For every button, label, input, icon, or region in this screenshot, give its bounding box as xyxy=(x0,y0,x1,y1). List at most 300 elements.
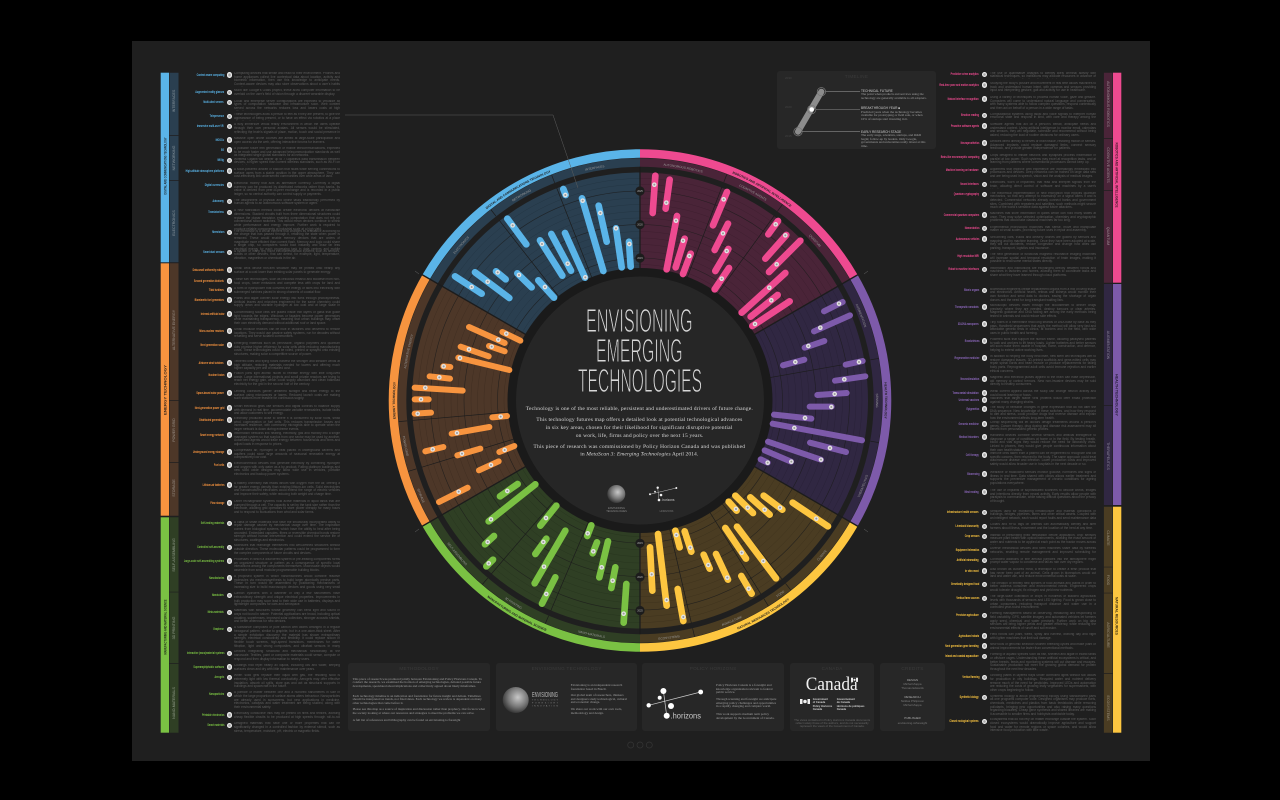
intro text: on work, life, firms and policy over the next 15 years. xyxy=(576,432,704,439)
title: ENVISIONING xyxy=(586,302,693,339)
left category band: energy: POWER GRID xyxy=(172,418,176,442)
item: neurostimulation: Neurostimulation xyxy=(960,377,979,381)
panel: methodology: METHODOLOGY xyxy=(399,666,439,671)
ring sub-category labels: THERAPEUTICS xyxy=(858,474,868,497)
methodology paragraph 3: Please see this map as a source of inspiration and discussion rather than prophecy. Our focus is what the society looking at where our resources and strategies to meet the problems we can solve. xyxy=(353,707,485,715)
item: closed ecological systems xyxy=(930,718,1096,733)
item: mind reading: Mind reading xyxy=(965,490,979,494)
central disc xyxy=(516,276,764,524)
item: designer body xyxy=(930,390,1096,397)
item: data-small uniformity robots xyxy=(192,267,340,274)
legend diagram: 2015 xyxy=(785,134,792,138)
ring category labels: ENERGY TECHNOLOGY xyxy=(392,382,396,419)
year badges: 2015 xyxy=(637,257,643,260)
item: infrastructure health sensors: Infrastructure health sensors xyxy=(947,510,979,514)
item: vertical farm xyxy=(930,595,1096,610)
year badges: 2025 xyxy=(637,609,643,612)
item: biomimetics: Nanotubes xyxy=(212,593,224,597)
envisioning text 3: We share our work with our own tools, methodology and design. xyxy=(571,707,622,715)
item: DNA nanopores xyxy=(930,321,1096,336)
item: human augmentation xyxy=(930,267,1096,278)
item: equipment telematics xyxy=(930,547,1096,555)
intro text xyxy=(526,405,753,458)
item: aerogels: Aerogels xyxy=(214,675,224,679)
item: smart materials xyxy=(180,722,340,733)
ring sub-category labels: AGRICULTURE xyxy=(722,616,742,626)
item: digital currencies: Digital currencies xyxy=(205,183,224,187)
ring sub-category labels: AUGMENTATION xyxy=(856,304,866,328)
ring sub-category labels: COGNITIVE AGENTS xyxy=(739,184,766,200)
ring sub-category labels: ELECTRONICS xyxy=(453,236,469,254)
item: meta materials: Meta-materials xyxy=(208,610,224,614)
item: autonomous vehicles: Autonomous vehicles xyxy=(955,237,979,241)
item: fuel cells: Fuel cells xyxy=(214,463,224,467)
item: superamphiphobic surfaces: Superamphiphobic surfaces xyxy=(193,665,224,669)
legend text: breakthrough year: Predicted years when the technology becomes available for prototyping or field sale, or when 10% of startups start investing in it. xyxy=(861,110,923,121)
item: therapeutic nanobots: Therapeutic nanobots xyxy=(955,305,979,309)
item: next generation solar: Next generation solar xyxy=(201,343,224,347)
item: nanoparticles: Nanoparticles xyxy=(209,692,224,696)
item: cell therapy xyxy=(930,452,1096,470)
credit: publisher: envisioning.io/foresight xyxy=(898,720,927,724)
left category band: energy xyxy=(161,263,176,516)
item: memristors: Memristors xyxy=(212,230,224,234)
item: bionic organs: Bionic organs xyxy=(964,288,979,292)
item: fish and insects: Vertical farming xyxy=(962,675,979,679)
item: 4D printing xyxy=(180,712,340,719)
legend text: maturity: TECHNICAL FUTURE xyxy=(861,89,893,93)
right category band: health technology: HEALTH TECHNOLOGY xyxy=(1115,374,1120,416)
bars: natural resources technology xyxy=(650,496,828,621)
item: aerogels xyxy=(180,674,340,689)
item: agricultural robots xyxy=(930,633,1096,640)
ring sub-category labels: ALTERNATIVE ENERGY xyxy=(404,334,413,368)
item: epigenetics: Epigenetics xyxy=(966,407,979,411)
item: nanorobots: Nanorobotics xyxy=(964,226,979,230)
legend text: maturity xyxy=(861,90,927,101)
ring sub-category labels xyxy=(402,131,878,640)
item: equipment telematics: Equipment telematics xyxy=(955,548,979,552)
legend text: development stage: EARLY RESEARCH STAGE xyxy=(861,130,901,134)
credit: design xyxy=(880,678,945,690)
item: genetically designed food xyxy=(930,582,1096,593)
item: neurostimulation xyxy=(930,376,1096,387)
item: transistorless: Transistorless xyxy=(209,210,224,214)
methodology paragraph 2: Each technology timeline is an indication and foundation for future insight and debate. Timelines should be interpreted as trends, not fixed dates. Each technology we review is dependent on many other technologies that come before it. xyxy=(353,694,482,705)
horizons text 2: Through scanning and foresight we anticipate emerging policy challenges and opportunities in a rapidly changing and complex world. xyxy=(716,697,776,708)
left category band: digital and communications: DIGITAL AND COMMUNICATIONS TECHNOLOGY xyxy=(162,137,167,194)
right category band: natural resources technology: FOOD xyxy=(1106,575,1110,586)
year badges: 2015 xyxy=(637,542,643,545)
credit: design: DESIGN xyxy=(907,678,918,682)
horizons text 1: Policy Horizons Canada is a foresight and knowledge organization relevant to federal public service. xyxy=(716,683,772,694)
ring sub-category labels: INTERFACES xyxy=(585,165,604,171)
item: genetically designed food: Genetically designed food xyxy=(951,582,979,586)
item: aquaculture xyxy=(930,653,1096,672)
item: exoskeletons: Exoskeletons xyxy=(964,339,979,343)
item: nanoparticles xyxy=(180,691,340,710)
left category band: digital and communications: ELECTRONICS xyxy=(172,210,176,236)
ring sub-category labels: SELF-ASSEMBLING xyxy=(448,542,467,566)
right category band: robotics and artificial intelligence: QUANTUM xyxy=(1106,227,1110,245)
callout line to digital bar xyxy=(345,115,578,188)
item: neural interface xyxy=(930,181,1096,189)
item: distributed generation: Distributed generation xyxy=(200,418,224,422)
item: WiGig: WiGig xyxy=(217,158,224,162)
poster background panel xyxy=(132,41,1150,761)
year badges: 2020 xyxy=(637,223,643,226)
item: space-based solar: Space-based solar power xyxy=(197,391,224,395)
envisioning logo: INNOVATION xyxy=(532,704,558,708)
left category band: manufacturing and material science xyxy=(161,517,176,733)
credit: design: Thomas Edwards xyxy=(901,686,924,690)
item: artificial rain xyxy=(930,558,1096,565)
item: livestock biosecurity: Livestock biosecurity xyxy=(956,524,979,528)
methodology paragraph 4: A full list of references and bibliography can be found on envisioning.io/foresight xyxy=(353,718,460,722)
central dark ring xyxy=(508,268,772,533)
item: next-generation power grid: Next-generation power grid xyxy=(194,406,224,410)
left category band: manufacturing and material science: MANUFACTURING AND MATERIAL SCIENCE xyxy=(162,599,167,654)
item: high resolution MRI xyxy=(930,253,1096,264)
title xyxy=(578,302,702,399)
item: aquaculture: Inland and coastal aquaculture xyxy=(946,654,979,658)
item: mind reading xyxy=(930,489,1096,504)
ring category labels: ROBOTICS AND ARTIFICIAL INTELLIGENCE xyxy=(732,172,792,208)
item: vertical farm: Vertical farm sources xyxy=(956,596,979,600)
legend text: development stage: The early stage, scientists, startups, and R&D begin; follow-up by leaders. Only Google, governments and universities really invest at this time. xyxy=(861,133,925,148)
list: energy technologies xyxy=(192,267,340,514)
time rings xyxy=(418,178,862,622)
canada wordmark: du Canada xyxy=(837,700,851,704)
canada wordmark: Canada xyxy=(806,674,858,695)
item: medical tricorders: Medical tricorders xyxy=(959,435,979,439)
canada wordmark xyxy=(790,663,874,731)
item: synthetic biology xyxy=(930,695,1096,717)
credit: publisher xyxy=(880,716,945,726)
canada wordmark: Government xyxy=(813,697,828,701)
panel: methodology xyxy=(348,663,490,731)
item: quantum cryptography xyxy=(930,192,1096,210)
ring category labels: HEALTH TECHNOLOGY xyxy=(884,382,888,419)
title: EMERGING xyxy=(596,332,683,369)
item: neuroprosthetics xyxy=(930,140,1096,151)
ring sub-category labels: AUTONOMOUS ROBOTICS xyxy=(664,164,702,173)
canada disclaimer: represent the views of the Government of Canada. xyxy=(800,724,865,728)
horizons logo xyxy=(642,663,714,731)
envisioning logo: FORESIGHT xyxy=(532,702,559,704)
credit: publisher: PUBLISHER xyxy=(904,716,921,720)
item: augmented reality glasses: Augmented reality glasses xyxy=(195,90,224,94)
item: commercial quantum xyxy=(930,212,1096,223)
item: vaccines xyxy=(930,397,1096,404)
item: synthetic biology: Synthetic biology xyxy=(960,695,979,699)
left category band: energy: ENERGY TECHNOLOGY xyxy=(162,365,167,415)
right category band: natural resources technology: AGRICULTURE xyxy=(1106,622,1110,648)
legend text: breakthrough year: BREAKTHROUGH YEAR ■ xyxy=(861,106,900,110)
sub-sector dividers xyxy=(399,174,879,636)
canada wordmark: Canada xyxy=(813,707,823,711)
item: nanofactories xyxy=(180,575,340,590)
ring category labels: MANUFACTURING AND MATERIAL SCIENCE xyxy=(487,596,547,632)
logo: envisioning: TECHNOLOGIES xyxy=(606,509,627,513)
ring category labels xyxy=(392,131,888,632)
item: exoskeletons xyxy=(930,338,1096,353)
item: self-healing materials: Self-healing materials xyxy=(200,521,224,525)
item: biosensing: Biosensing xyxy=(967,472,979,476)
right category band: health technology: AUGMENTATION xyxy=(1106,331,1110,360)
envisioning text 2: Our global team of researchers, thinkers and designers study technological, cultural and economic change. xyxy=(571,693,627,704)
circular chart xyxy=(388,149,892,652)
item: neural interface recognition xyxy=(930,96,1096,111)
list: health technology xyxy=(930,284,1096,506)
item: fourth generation breeding: Next generation gene breeding xyxy=(946,644,979,648)
horizons logo: .horizons xyxy=(671,710,701,720)
ring sub-category labels: NANO-MATERIALS xyxy=(578,630,605,638)
methodology paragraph 1: This piece of research was produced jointly between Envisioning and Policy Horizons Canada. To conduct the research, we examined the horizon of emerging technologies, debated possible future developments, speculated about implications and collectively agreed about likely timeframes. xyxy=(353,676,482,688)
boundary ticks xyxy=(415,271,868,532)
envisioning logo xyxy=(496,663,576,731)
item: smart materials: Smart materials xyxy=(207,723,224,727)
left category band: digital and communications xyxy=(161,73,176,262)
intro text: in six key areas, chosen for their likelihood for significant disruptive potential xyxy=(546,424,733,431)
ring sub-category labels: 3D PRINTING xyxy=(505,597,522,609)
right category band: robotics and artificial intelligence: ROBOTICS AND ARTIFICIAL INTELLIGENCE xyxy=(1115,142,1120,208)
item: infrastructure health sensors xyxy=(930,510,1096,521)
year badges: 2020 xyxy=(637,576,643,579)
item: superamphiphobic surfaces xyxy=(180,664,340,671)
item: interactive material systems: Interactive (nano)material systems xyxy=(187,651,224,655)
footer social icons xyxy=(628,742,652,748)
bars: health technology xyxy=(761,302,865,463)
item: human augmentation: Robot to machine interfaces xyxy=(948,267,979,271)
right category band: natural resources technology: CLIMATE xyxy=(1106,530,1110,546)
sector boundaries xyxy=(422,167,858,634)
credit: research: Michell Zappa xyxy=(904,703,922,707)
credit: research: Nicklas Philipsson xyxy=(901,699,924,703)
ring sub-category labels: FOOD xyxy=(776,590,784,598)
item: flow storage: Flow storage xyxy=(210,501,224,505)
item: medical tricorders xyxy=(930,434,1096,452)
item: therapeutic nanobots xyxy=(930,304,1096,319)
credit: research: RESEARCH xyxy=(904,695,921,699)
canada disclaimer: The views contained in Policy Horizons Canada documents xyxy=(794,718,870,722)
item: artificial rain: Artificial rainmaking xyxy=(957,558,979,562)
ring sub-category labels: CLIMATE xyxy=(817,550,827,560)
item: meta materials xyxy=(180,609,340,624)
ring sub-category labels: STORAGE xyxy=(417,488,425,503)
item: in vitro meat: In vitro meat xyxy=(965,569,979,573)
item: predictive crime analytics: Predictive crime analytics xyxy=(951,72,979,76)
panel: canada: CANADA xyxy=(822,666,843,671)
ring category labels: DIGITAL AND COMMUNICATIONS TECHNOLOGY xyxy=(486,170,550,210)
item: high resolution MRI: High resolution MRI xyxy=(957,254,979,258)
item: underground energy storage: Underground energy storage xyxy=(193,450,224,454)
item: smart energy network: Smart energy network xyxy=(200,433,224,437)
logo: policy horizons: HORIZONS xyxy=(660,509,674,513)
right category band: health technology: THERAPEUTICS xyxy=(1106,442,1110,470)
item: graphene xyxy=(180,626,340,648)
panel: credits xyxy=(880,663,945,731)
intro text: This piece of research was commissioned by Policy Horizon Canada and was published xyxy=(533,443,745,450)
item: interactive material systems xyxy=(180,650,340,661)
item: epigenetics xyxy=(930,406,1096,421)
canada disclaimer xyxy=(790,718,874,728)
item: context aware computing: Context aware computing xyxy=(196,73,224,77)
item: vaccines: Universal vaccines xyxy=(958,398,979,402)
item: MOOCs: MOOCs xyxy=(216,138,224,142)
logo: envisioning: ENVISIONING xyxy=(608,506,625,510)
item: smart dust sensors: Smart dust sensors xyxy=(203,250,224,254)
logo: envisioning xyxy=(606,485,627,513)
item: emotion reading xyxy=(930,113,1096,120)
panel: credits: CREDITS xyxy=(901,666,924,671)
legend text: maturity: The point when products and services using the technology are generally available to all adopters. xyxy=(861,92,927,100)
intro text: in MetaScan 3: Emerging Technologies April 2014. xyxy=(580,452,699,458)
right category band: natural resources technology: ECOSYSTEMS xyxy=(1106,696,1110,721)
bars: energy technology xyxy=(415,327,520,502)
item: predictive crime analytics xyxy=(930,72,1096,79)
intro text: This technology futures map offers a detailed look at potential technological advances xyxy=(536,416,742,423)
panel: envisioning technology xyxy=(496,663,637,731)
item: 5G: 5G xyxy=(221,148,224,152)
item: autonomy: Autonomy xyxy=(213,199,224,203)
item: large-scale self-assembling: Large-scale self-assembling systems xyxy=(184,559,224,563)
canada wordmark: Policy Horizons xyxy=(813,704,833,708)
item: 4D printing: Printable electronics xyxy=(202,713,224,717)
item: internal artificial solar: Internal artificial solar xyxy=(200,312,224,316)
item: large-scale self-assembling xyxy=(184,558,340,572)
item: graphene: Graphene xyxy=(213,627,224,631)
legend diagram: 2030 xyxy=(785,76,792,80)
item: crop sensors: Crop sensors xyxy=(964,534,979,538)
item: fourth generation breeding xyxy=(930,643,1096,650)
canada wordmark: of Canada xyxy=(813,700,826,704)
credit: research xyxy=(880,695,945,707)
ring sub-category labels: ECOSYSTEMS xyxy=(658,635,680,640)
item: second generation biofuels: Second generation biofuels xyxy=(194,279,224,283)
item: crop sensors xyxy=(930,534,1096,545)
item: controlled self-assembly xyxy=(197,544,340,555)
item: nanorobots xyxy=(930,226,1096,233)
legend: timeline: TIMELINE xyxy=(845,74,868,79)
ring sub-category labels: NETWORKING xyxy=(512,190,531,202)
panel: policy horizons: POLICY HORIZONS xyxy=(690,666,737,671)
item: brain-like computing: Brain-like neuromorphic computing xyxy=(940,155,979,159)
logo: policy horizons xyxy=(649,486,677,513)
item: real-time pose analytics: Real-time pose and motion analytics xyxy=(939,83,979,87)
legend diagram xyxy=(777,71,936,149)
item: emotion reading: Emotion reading xyxy=(961,113,979,117)
credit: design: Michell Zappa xyxy=(904,682,922,686)
item: regenerative medicine xyxy=(930,355,1096,373)
item: biomimetic fuel: Biomimetic fuel generators xyxy=(195,298,224,302)
item: cell therapy: Cell therapy xyxy=(966,453,979,457)
right category band: natural resources technology: NATURAL RESOURCES xyxy=(1115,597,1120,635)
ring category labels: NATURAL RESOURCES TECHNOLOGY xyxy=(737,598,789,630)
item: designer body: Transcranial stimulation xyxy=(953,391,979,395)
left category band: energy: ALTERNATIVE ENERGY xyxy=(172,309,176,350)
year badges xyxy=(635,186,645,615)
ring sub-category labels: SENSING xyxy=(876,394,878,408)
legend diagram: 2020 xyxy=(785,105,792,109)
list: robotics and artificial intelligence xyxy=(930,70,1096,283)
item: agricultural robots: Agricultural robots xyxy=(958,634,979,638)
outer colour ring xyxy=(393,154,887,648)
sector fills xyxy=(460,220,820,580)
item: biomimetics xyxy=(180,592,340,607)
left category band: manufacturing and material science: 3D PRINTING xyxy=(172,616,176,639)
canada wordmark: Gouvernement xyxy=(837,697,855,701)
list: digital and communications technologies xyxy=(186,72,340,260)
item: high-altitude atmosphere platforms xyxy=(186,168,340,178)
envisioning text 1: Envisioning is an independent research foundation based in Brazil. xyxy=(571,683,622,691)
item: neural interface: Neural interfaces xyxy=(961,182,979,186)
item: biosensing xyxy=(930,471,1096,486)
item: closed ecological systems: Closed ecological systems xyxy=(950,719,979,723)
item: machine learning xyxy=(930,168,1096,179)
bars: digital and communications xyxy=(455,189,631,298)
left category band: energy: STORAGE xyxy=(172,479,176,497)
left category band: manufacturing and material science: NANO-MATERIALS xyxy=(172,687,176,719)
item: bionic organs xyxy=(930,288,1096,302)
item: quantum cryptography: Quantum cryptography xyxy=(954,192,979,196)
item: high-altitude atmosphere platforms: High-altitude atmosphere platforms xyxy=(186,169,224,173)
legend: timeline xyxy=(777,71,936,149)
list: manufacturing and material science xyxy=(184,521,340,733)
item: data-small uniformity robots: Data-small uniformity robots xyxy=(193,268,224,272)
item: neural interface recognition: Natural interface recognition xyxy=(948,97,979,101)
item: genomic medicine xyxy=(930,421,1096,432)
item: proactive software agents xyxy=(930,123,1096,138)
horizons text 3: This work supports medium term policy development by the Government of Canada. xyxy=(716,712,774,720)
canada wordmark: Horizons de politiques xyxy=(837,704,865,708)
ring sub-category labels: POWER GRID xyxy=(402,436,408,456)
list: natural resources technology xyxy=(930,506,1096,734)
item: fish and insects xyxy=(930,674,1096,693)
item: proactive software agents: Proactive software agents xyxy=(951,124,979,128)
item: multi-sited servers: Multi-sited servers xyxy=(204,100,224,104)
right category band: health technology xyxy=(1106,284,1121,505)
right category band: natural resources technology xyxy=(1106,507,1121,733)
item: machine learning: Machine learning on hardware xyxy=(946,168,979,172)
right category band: robotics and artificial intelligence xyxy=(1106,73,1121,283)
item: regenerative medicine: Regenerative medicine xyxy=(954,356,979,360)
item: wind turbine: Airborne wind turbines xyxy=(199,361,224,365)
item: brain-like computing xyxy=(930,154,1096,165)
item: autonomous vehicles xyxy=(930,236,1096,251)
envisioning logo: TECHNOLOGY xyxy=(532,700,559,702)
left category band: digital and communications: INTERFACES xyxy=(172,89,176,112)
item: precision agriculture xyxy=(930,612,1096,631)
bars: manufacturing and material science xyxy=(485,484,626,623)
item: real-time pose analytics xyxy=(930,82,1096,93)
right category band: robotics and artificial intelligence: COGNITIVE AGENTS xyxy=(1106,147,1110,183)
item: immersive multi user AR: Immersive multi-user VR xyxy=(197,124,224,128)
item: nanofactories: Nanofactories xyxy=(209,576,224,580)
year badges: 2025 xyxy=(637,190,643,193)
item: precision agriculture: Precision agriculture xyxy=(956,613,979,617)
left category band: digital and communications: NETWORKING xyxy=(172,145,176,170)
item: micro-nuclear reactors: Micro-nuclear reactors xyxy=(199,329,224,333)
text: TECHNOLOGIES xyxy=(578,362,702,399)
right category band: robotics and artificial intelligence: AUTONOMOUS ROBOTICS xyxy=(1106,81,1110,128)
item: livestock biosecurity xyxy=(930,523,1096,531)
panel: canada xyxy=(790,663,874,731)
canada wordmark: Canada xyxy=(837,707,847,711)
panel: policy horizons xyxy=(642,663,784,731)
sub-category ring xyxy=(402,162,878,638)
left category band: manufacturing and material science: SELF-ASSEMBLING xyxy=(172,538,176,572)
